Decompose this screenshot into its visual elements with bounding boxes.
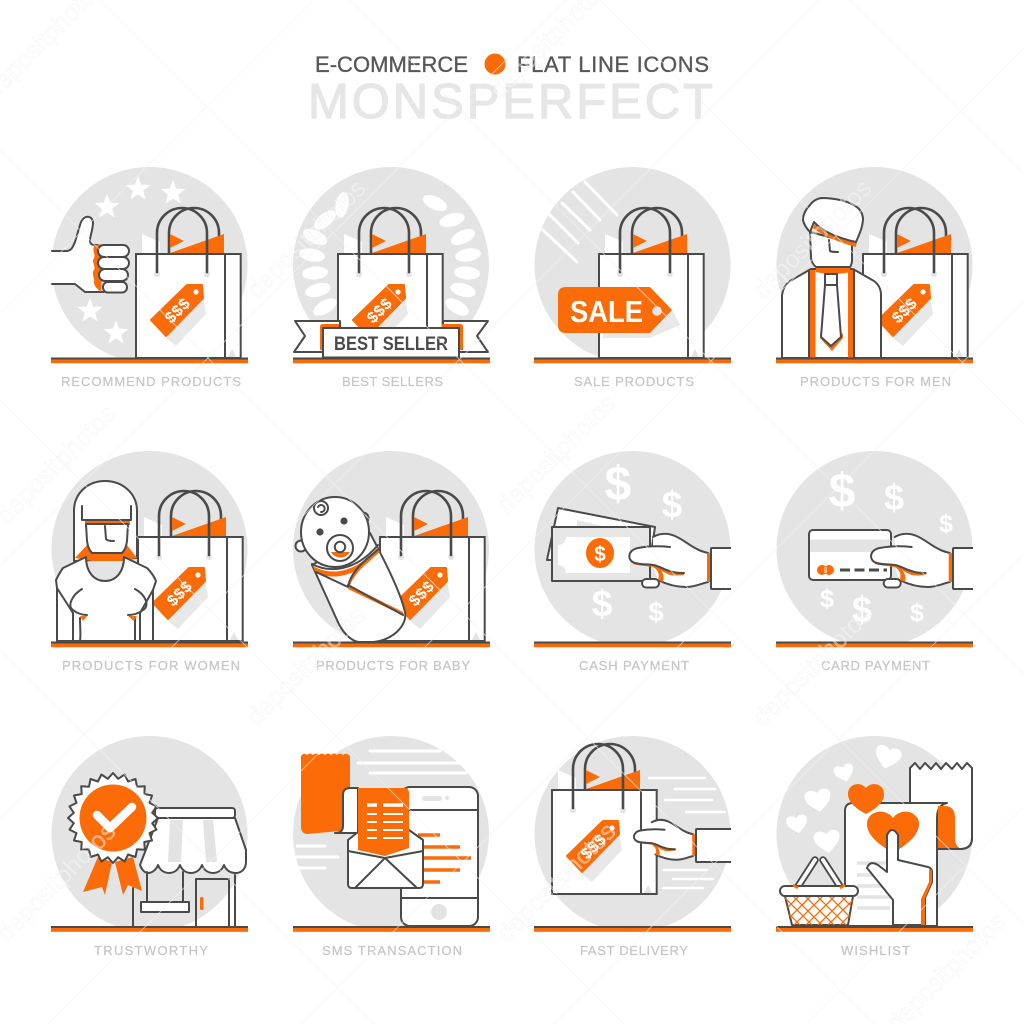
label: SMS TRANSACTION xyxy=(322,943,462,958)
icon: woman xyxy=(56,481,156,641)
brand name heading: MONSPERFECT xyxy=(308,75,713,129)
ground line xyxy=(293,926,490,932)
panel: card payment xyxy=(776,451,973,673)
icon: shopping bag xyxy=(138,491,243,641)
icon: banknotes xyxy=(547,508,655,581)
decorative white lines xyxy=(297,751,466,868)
watermark overlay: depositphotos xyxy=(491,389,621,519)
icon: sale tag xyxy=(558,287,680,338)
icon: smartphone xyxy=(401,787,478,926)
icon: shopping bag xyxy=(380,491,485,641)
icon: swaddled baby xyxy=(296,497,405,642)
icon: banknotes: $ xyxy=(594,543,606,566)
panel: SMS transaction xyxy=(293,736,490,958)
decorative speed lines xyxy=(649,778,725,888)
icon: receipt paper xyxy=(845,763,972,926)
label: CASH PAYMENT xyxy=(579,658,689,673)
panel: wishlist xyxy=(776,736,973,958)
ground line xyxy=(293,642,490,647)
icon: dollar signs: $ xyxy=(605,458,632,511)
title: E-commerce flat line icons: E-COMMERCE xyxy=(315,52,468,77)
icon: shopping bag xyxy=(136,208,241,358)
icon: shopping bag: $$$ xyxy=(889,295,921,327)
label: WISHLIST xyxy=(841,943,910,958)
icon: dollar signs: $ xyxy=(592,583,613,624)
ground line xyxy=(51,926,248,932)
icon: shopping bag: $$$ xyxy=(364,295,396,327)
icon: best seller ribbon: BEST SELLER xyxy=(334,333,448,355)
icon: shopping bag xyxy=(552,744,657,894)
panel: products for women xyxy=(51,451,248,673)
watermark overlay: depositphotos xyxy=(241,601,371,731)
panel: best sellers xyxy=(293,167,490,389)
panel: recommend products xyxy=(51,167,248,389)
icon: orange receipt xyxy=(301,754,350,834)
icon: best seller ribbon xyxy=(294,321,488,358)
icon: stars xyxy=(78,176,185,344)
label: CARD PAYMENT xyxy=(821,658,930,673)
ground line xyxy=(51,642,248,647)
panel: sale products xyxy=(534,167,731,389)
panel: cash payment xyxy=(534,451,731,673)
icon: shopping bag: $$$ xyxy=(578,831,610,863)
label: FAST DELIVERY xyxy=(580,943,688,958)
decorative white stripes xyxy=(543,182,617,262)
icon: dollar signs: $ xyxy=(648,597,664,627)
icon: shopping bag xyxy=(338,208,443,358)
icon: dollar signs: $ xyxy=(852,589,872,630)
ground line xyxy=(776,926,973,932)
icon: dollar signs: $ xyxy=(820,585,834,613)
ground line xyxy=(776,642,973,647)
icon: credit card xyxy=(809,530,891,580)
icon: shopping basket xyxy=(780,860,860,930)
ground line xyxy=(534,642,731,647)
icon: hand holding xyxy=(871,534,973,589)
icon: orange hearts xyxy=(848,784,919,853)
panel: products for baby xyxy=(293,451,490,673)
icon: dollar signs xyxy=(820,465,953,630)
icon: laurel wreath xyxy=(298,191,482,319)
label: BEST SELLERS xyxy=(342,374,443,389)
watermark overlay: depositphotos xyxy=(747,174,877,304)
icon: thumbs up hand xyxy=(51,217,129,292)
icon: shopping bag: $$$ xyxy=(406,578,438,610)
ground line xyxy=(293,358,490,363)
icon: envelope with invoice xyxy=(335,788,423,888)
icon: hand holding xyxy=(629,534,731,589)
icon: rosette badge xyxy=(68,773,158,895)
label: SALE PRODUCTS xyxy=(574,374,694,389)
icon: sale tag: SALE xyxy=(570,294,643,329)
icon: dollar signs: $ xyxy=(939,510,953,538)
ground line xyxy=(776,358,973,363)
ground line xyxy=(51,358,248,363)
icon: white hearts xyxy=(785,744,903,855)
label: RECOMMEND PRODUCTS xyxy=(61,374,241,389)
panel: fast delivery xyxy=(534,736,731,958)
title: E-commerce flat line icons xyxy=(315,52,709,77)
label: PRODUCTS FOR MEN xyxy=(800,374,951,389)
icon: dollar signs: $ xyxy=(884,477,904,518)
watermark overlay: depositphotos xyxy=(491,817,621,947)
watermark overlay: depositphotos xyxy=(241,174,371,304)
icon: pointing hand xyxy=(867,830,932,925)
ground line xyxy=(534,926,731,932)
panel: products for men xyxy=(776,167,973,389)
label: PRODUCTS FOR WOMEN xyxy=(62,658,240,673)
icon: shopping bag xyxy=(599,208,704,358)
label: TRUSTWORTHY xyxy=(94,943,208,958)
title: E-commerce flat line icons: FLAT LINE ICONS xyxy=(517,52,709,77)
icon: shop xyxy=(133,808,246,926)
icon: dollar signs xyxy=(592,458,683,627)
icon: dollar signs: $ xyxy=(662,484,683,525)
icon: dollar signs: $ xyxy=(829,465,856,518)
icon: shopping bag: $$$ xyxy=(162,295,194,327)
watermark overlay: depositphotos xyxy=(747,601,877,731)
icon: shopping bag xyxy=(863,208,968,358)
panel: trustworthy xyxy=(51,736,248,958)
label: PRODUCTS FOR BABY xyxy=(316,658,470,673)
icon: dollar signs: $ xyxy=(910,599,924,627)
icon: shopping bag: $$$ xyxy=(164,578,196,610)
ground line xyxy=(534,358,731,363)
icon: businessman xyxy=(782,198,881,358)
icon: hand holding bag xyxy=(634,820,731,862)
